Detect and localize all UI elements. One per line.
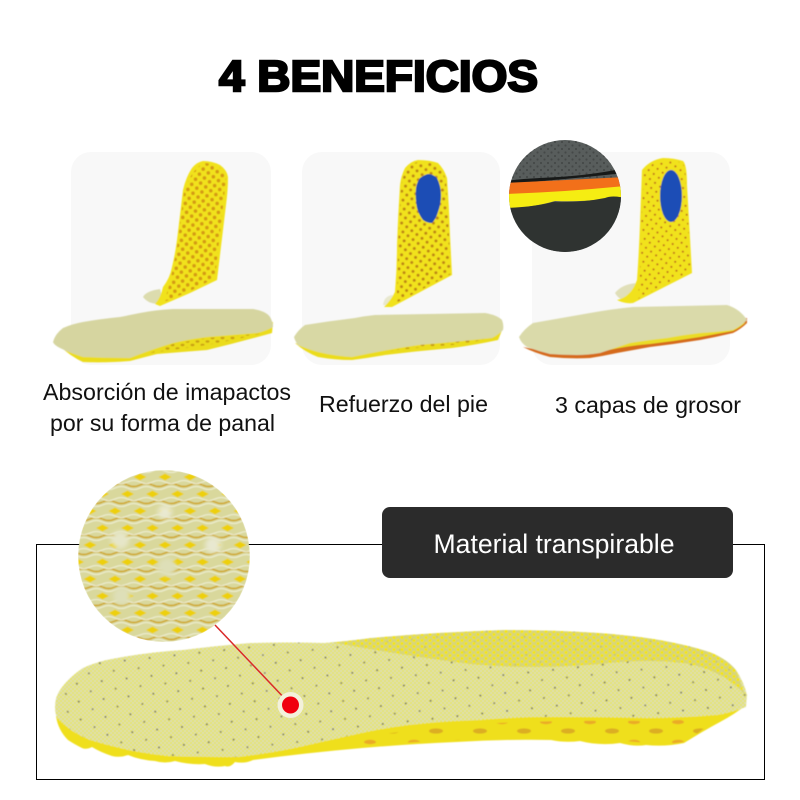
insole flat 2: [294, 313, 503, 360]
caption: layers: 3 capas de grosor: [555, 392, 741, 418]
badge: material transpirable: Material transpirable: [434, 529, 674, 559]
insole upright 3: [615, 158, 692, 303]
insole flat 3: [519, 305, 747, 358]
caption: shock absorption: Absorción de imapactos: [43, 379, 291, 405]
card background 1: [71, 152, 271, 365]
insole upright 2: [383, 160, 452, 307]
blue heel pad 3: [660, 170, 682, 222]
mesh top surface: [50, 625, 750, 765]
magnifier: mesh texture: [78, 470, 250, 642]
frame: [36, 544, 764, 780]
card background 2: [302, 152, 500, 365]
caption: reinforcement: Refuerzo del pie: [319, 391, 488, 417]
insole upright 1: [143, 161, 228, 306]
panel: shock absorption: [53, 152, 273, 365]
panel: three layers: [505, 136, 747, 365]
yellow sole: [56, 705, 746, 767]
main insole: [50, 625, 750, 767]
badge: material transpirable: [382, 507, 733, 578]
card background 3: [532, 152, 730, 365]
title: 4 BENEFICIOS: [219, 52, 538, 101]
magnifier: layers: [509, 140, 621, 252]
callout pointer: [215, 625, 304, 718]
caption: shock absorption: por su forma de panal: [50, 410, 275, 436]
blue heel pad 2: [416, 174, 441, 223]
insole flat 1: [53, 309, 273, 362]
panel: foot reinforcement: [294, 152, 503, 365]
